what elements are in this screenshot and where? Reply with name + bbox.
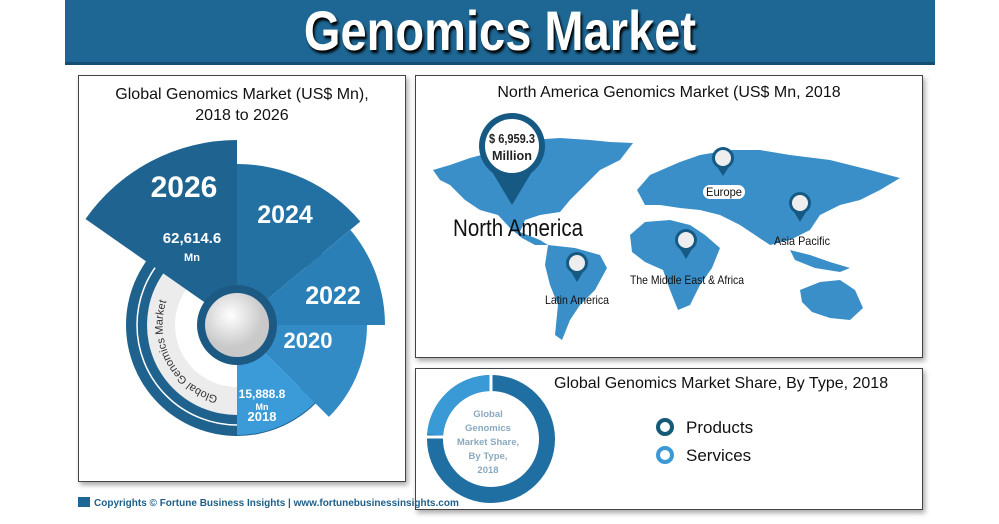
share heading: Global Genomics Market Share, By Type, 2018 — [554, 375, 888, 392]
region labels — [453, 185, 830, 307]
sector 2024 — [237, 164, 360, 325]
donut chart: Global — [473, 409, 503, 420]
legend: Products — [686, 418, 753, 437]
labels: 2022 — [305, 282, 361, 310]
panel heading — [115, 86, 369, 124]
region labels: The Middle East & Africa — [630, 273, 744, 287]
sector 2022 — [237, 230, 385, 325]
labels: 2026 — [151, 171, 217, 204]
labels — [151, 171, 361, 424]
labels: 15,888.8 — [239, 387, 286, 401]
pins small — [566, 147, 811, 282]
ring base — [126, 214, 348, 436]
labels: 2020 — [284, 328, 332, 353]
panel: global market fan chart — [78, 75, 406, 482]
region labels: Asia Pacific — [774, 234, 830, 248]
fan chart: Global Genomics Market — [155, 300, 217, 403]
panel heading: Global Genomics Market (US$ Mn), — [115, 86, 369, 103]
sector 2018 — [237, 325, 315, 435]
world map — [433, 113, 900, 340]
panel: north america map — [415, 75, 923, 358]
map heading: North America Genomics Market (US$ Mn, 2018 — [497, 84, 841, 101]
labels: Mn — [184, 252, 200, 264]
footer copyright: Copyrights © Fortune Business Insights | www.fortunebusinessinsights.com — [94, 498, 459, 509]
pin: north america — [479, 113, 545, 205]
labels: 2024 — [257, 201, 313, 229]
donut chart: Genomics — [465, 423, 511, 434]
donut chart — [427, 375, 555, 503]
sector 2020 — [237, 325, 367, 417]
labels: Mn — [256, 402, 268, 412]
donut chart: 2018 — [477, 465, 499, 476]
panel heading: 2018 to 2026 — [195, 107, 289, 124]
labels: 62,614.6 — [163, 230, 221, 247]
center circle — [197, 285, 277, 365]
pin: north america: $ 6,959.3 — [489, 131, 535, 146]
legend: Services — [686, 446, 751, 465]
donut chart: Market Share, — [457, 437, 519, 448]
pin: north america: Million — [492, 148, 532, 163]
sector 2026 — [86, 140, 237, 325]
title: Genomics Market — [304, 0, 696, 62]
fan chart — [86, 140, 385, 436]
region labels: North America — [453, 215, 584, 242]
region labels: Europe — [706, 185, 742, 199]
header banner — [65, 0, 935, 65]
legend — [656, 418, 753, 465]
ring label — [163, 277, 221, 397]
labels: 2018 — [248, 409, 276, 424]
donut chart: By Type, — [469, 451, 507, 462]
region labels: Latin America — [545, 293, 609, 307]
panel: market share by type — [415, 368, 923, 510]
